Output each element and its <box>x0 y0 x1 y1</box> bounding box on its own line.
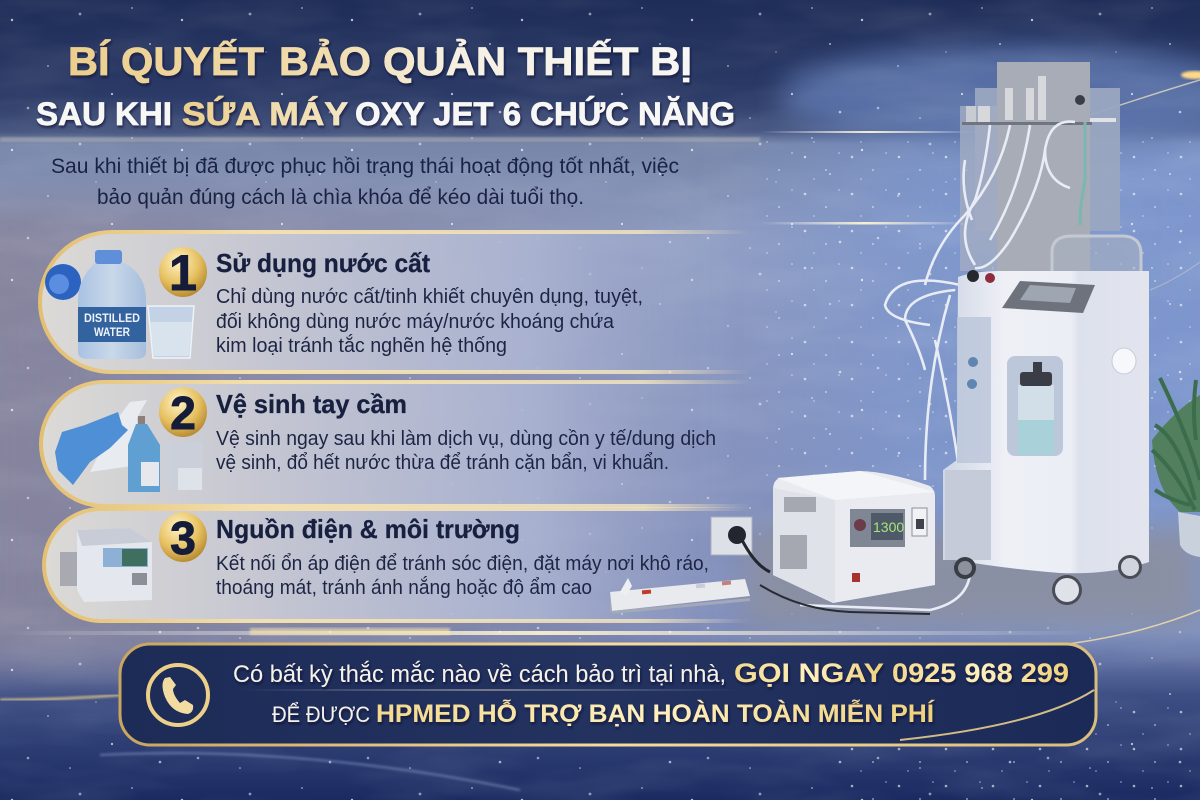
oxy jet machine <box>800 62 1149 610</box>
icon: phone <box>148 665 208 725</box>
icon: glass of water <box>148 306 194 358</box>
cta line 1: Có bất kỳ thắc mắc nào về cách bảo trì tại nhà, <box>233 661 726 688</box>
acrylic panels and manifold <box>960 62 1120 274</box>
water jar window <box>1007 356 1063 456</box>
title: BẢO <box>279 38 371 84</box>
panel 1: distilled water <box>40 232 750 372</box>
stabilizer display <box>850 509 905 547</box>
floor <box>745 528 1200 628</box>
left recess <box>957 317 991 463</box>
text 3: thoáng mát, tránh ánh nắng hoặc độ ẩm cao <box>216 576 592 599</box>
title: QUẢN THIẾT BỊ <box>383 38 692 84</box>
title: SỨA MÁY <box>182 96 348 132</box>
wheels <box>954 555 1142 605</box>
logo badge <box>1112 348 1136 374</box>
voltage stabilizer <box>760 471 935 614</box>
intro text <box>51 155 679 209</box>
badge 2 <box>159 387 207 439</box>
text 1 <box>216 286 643 357</box>
call to action banner <box>120 644 1096 745</box>
gold light streaks <box>0 610 1200 700</box>
title <box>36 38 735 132</box>
text 3: Kết nối ổn áp điện để tránh sóc điện, đặt máy nơi khô ráo, <box>216 553 709 575</box>
icon: water bottle <box>45 250 146 359</box>
text 1: Chỉ dùng nước cất/tinh khiết chuyên dụng, tuyệt, <box>216 286 643 308</box>
intro text: Sau khi thiết bị đã được phục hồi trạng thái hoạt động tốt nhất, việc <box>51 155 679 178</box>
badge 1: 1 <box>169 245 197 301</box>
handle <box>1052 236 1141 272</box>
heading 1: Sử dụng nước cất <box>216 248 430 278</box>
badge 3 <box>159 512 207 564</box>
control knobs <box>967 270 995 389</box>
icon: water bottle: WATER <box>94 325 130 339</box>
cta line 2: HPMED HỖ TRỢ BẠN HOÀN TOÀN MIỄN PHÍ <box>376 698 935 728</box>
screen <box>1002 281 1095 313</box>
badge 1 <box>159 245 207 301</box>
plant <box>1152 378 1200 557</box>
badge 3: 3 <box>170 512 196 564</box>
panel 2: cleaning handle <box>41 382 750 506</box>
text 3 <box>216 553 709 599</box>
text 1: kim loại tránh tắc nghẽn hệ thống <box>216 334 507 357</box>
machine body <box>943 271 1149 573</box>
stabilizer display: 1300 <box>873 519 904 535</box>
intro text: bảo quản đúng cách là chìa khóa để kéo dài tuổi thọ. <box>97 186 584 209</box>
title: BÍ QUYẾT <box>68 38 264 84</box>
text 2 <box>216 428 716 474</box>
text 2: Vệ sinh ngay sau khi làm dịch vụ, dùng cồn y tế/dung dịch <box>216 428 716 450</box>
cta line 1: 0925 968 299 <box>892 658 1069 688</box>
cta line 2: ĐỂ ĐƯỢC <box>272 702 370 727</box>
text 1: đối không dùng nước máy/nước khoáng chứa <box>216 311 615 333</box>
tubes <box>800 122 1075 610</box>
power strip <box>610 578 750 614</box>
cta line 1: GỌI NGAY <box>734 658 884 688</box>
cta line 1 <box>233 658 1069 688</box>
panel 3: power and environment <box>44 509 750 621</box>
text 2: vệ sinh, đổ hết nước thừa để tránh cặn bẩn, vi khuẩn. <box>216 452 669 474</box>
icon: voltage stabilizer <box>60 528 152 602</box>
icon: water bottle: DISTILLED <box>84 311 140 325</box>
icon: spray bottle <box>162 442 203 490</box>
wall outlet <box>711 517 770 572</box>
badge 2: 2 <box>170 387 196 439</box>
title: SAU KHI <box>36 96 172 132</box>
title: OXY JET 6 CHỨC NĂNG <box>355 96 735 132</box>
heading 3: Nguồn điện & môi trường <box>216 514 520 544</box>
icon: cleaning bottle <box>128 416 160 492</box>
heading 2: Vệ sinh tay cầm <box>216 389 407 419</box>
icon: gloved hand with cloth <box>55 400 147 485</box>
